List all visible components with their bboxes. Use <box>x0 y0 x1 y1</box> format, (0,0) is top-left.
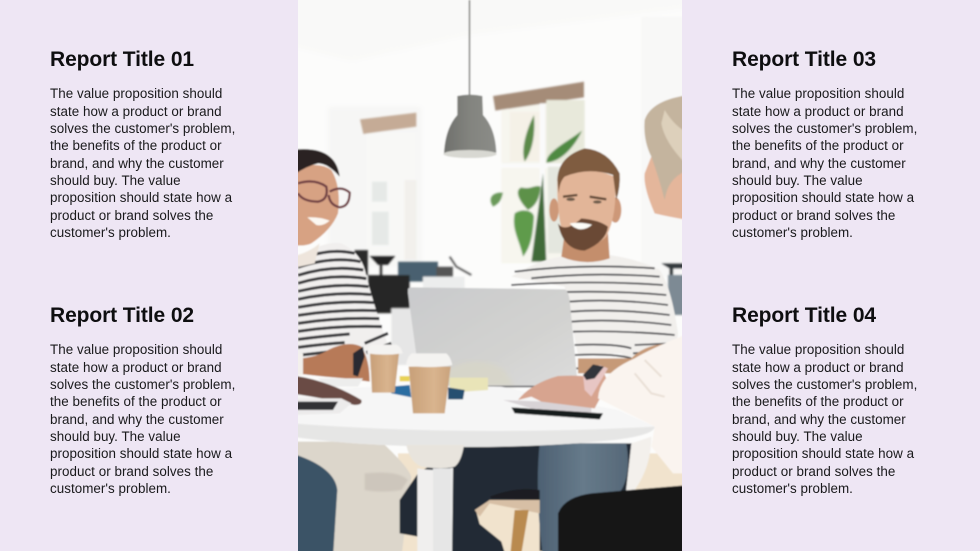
body text: solves the customer's problem, <box>732 121 917 136</box>
body text: proposition should state how a <box>50 446 232 461</box>
text block: Report Title 02 <box>50 304 235 496</box>
body text: the benefits of the product or <box>732 394 904 409</box>
body text: customer's problem. <box>732 481 853 496</box>
body text: should buy. The value <box>50 429 181 444</box>
body text: solves the customer's problem, <box>732 377 917 392</box>
coffee cup large <box>406 353 452 413</box>
man in striped shirt <box>505 148 678 373</box>
body text: state how a product or brand <box>732 104 904 119</box>
woman's hand, tablet <box>291 344 370 415</box>
body text: proposition should state how a <box>732 190 914 205</box>
body text: The value proposition should <box>732 342 904 357</box>
body text: the benefits of the product or <box>50 394 222 409</box>
floor <box>398 453 689 551</box>
body text: The value proposition should <box>50 342 222 357</box>
body text: state how a product or brand <box>50 104 222 119</box>
man's head <box>549 148 621 262</box>
body text <box>50 86 235 240</box>
body text: state how a product or brand <box>732 360 904 375</box>
body text: the benefits of the product or <box>732 138 904 153</box>
right window with plant <box>491 82 585 263</box>
body text: state how a product or brand <box>50 360 222 375</box>
notebooks and books on table <box>390 376 488 399</box>
woman on right: sleeve <box>598 333 689 473</box>
body text: brand, and why the customer <box>732 156 906 171</box>
body text: The value proposition should <box>732 86 904 101</box>
body text: product or brand solves the <box>732 464 895 479</box>
photo: team meeting around a table <box>298 0 682 551</box>
table <box>291 386 655 551</box>
body text: product or brand solves the <box>50 464 213 479</box>
body text: customer's problem. <box>50 481 171 496</box>
body text: the benefits of the product or <box>50 138 222 153</box>
woman with glasses <box>291 149 391 372</box>
body text: The value proposition should <box>50 86 222 101</box>
body text: proposition should state how a <box>732 446 914 461</box>
coffee cup small <box>367 345 403 393</box>
body text: product or brand solves the <box>50 208 213 223</box>
phone and hand <box>503 364 608 419</box>
heading: Report Title 04 <box>732 304 876 327</box>
body text: should buy. The value <box>50 173 181 188</box>
heading: Report Title 02 <box>50 304 194 327</box>
heading: Report Title 01 <box>50 48 194 71</box>
man's jeans and chair <box>400 437 651 551</box>
body text: customer's problem. <box>50 225 171 240</box>
body text: solves the customer's problem, <box>50 377 235 392</box>
text block: Report Title 03 <box>732 48 917 240</box>
body text <box>732 86 917 240</box>
body text <box>50 342 235 496</box>
woman's trousers and jeans <box>291 442 411 551</box>
body text: customer's problem. <box>732 225 853 240</box>
body text: proposition should state how a <box>50 190 232 205</box>
text block: Report Title 01 <box>50 48 235 240</box>
text block: Report Title 04 <box>732 304 917 496</box>
woman on right: head <box>644 95 689 220</box>
body text: should buy. The value <box>732 429 863 444</box>
room background <box>291 0 689 551</box>
body text: should buy. The value <box>732 173 863 188</box>
background furniture <box>355 250 689 365</box>
laptop <box>408 287 581 387</box>
left window <box>360 113 416 265</box>
body text <box>732 342 917 496</box>
body text: product or brand solves the <box>732 208 895 223</box>
lamp <box>443 0 497 158</box>
body text: brand, and why the customer <box>50 412 224 427</box>
person on right: dark leg <box>558 485 689 551</box>
body text: solves the customer's problem, <box>50 121 235 136</box>
body text: brand, and why the customer <box>50 156 224 171</box>
heading: Report Title 03 <box>732 48 876 71</box>
body text: brand, and why the customer <box>732 412 906 427</box>
